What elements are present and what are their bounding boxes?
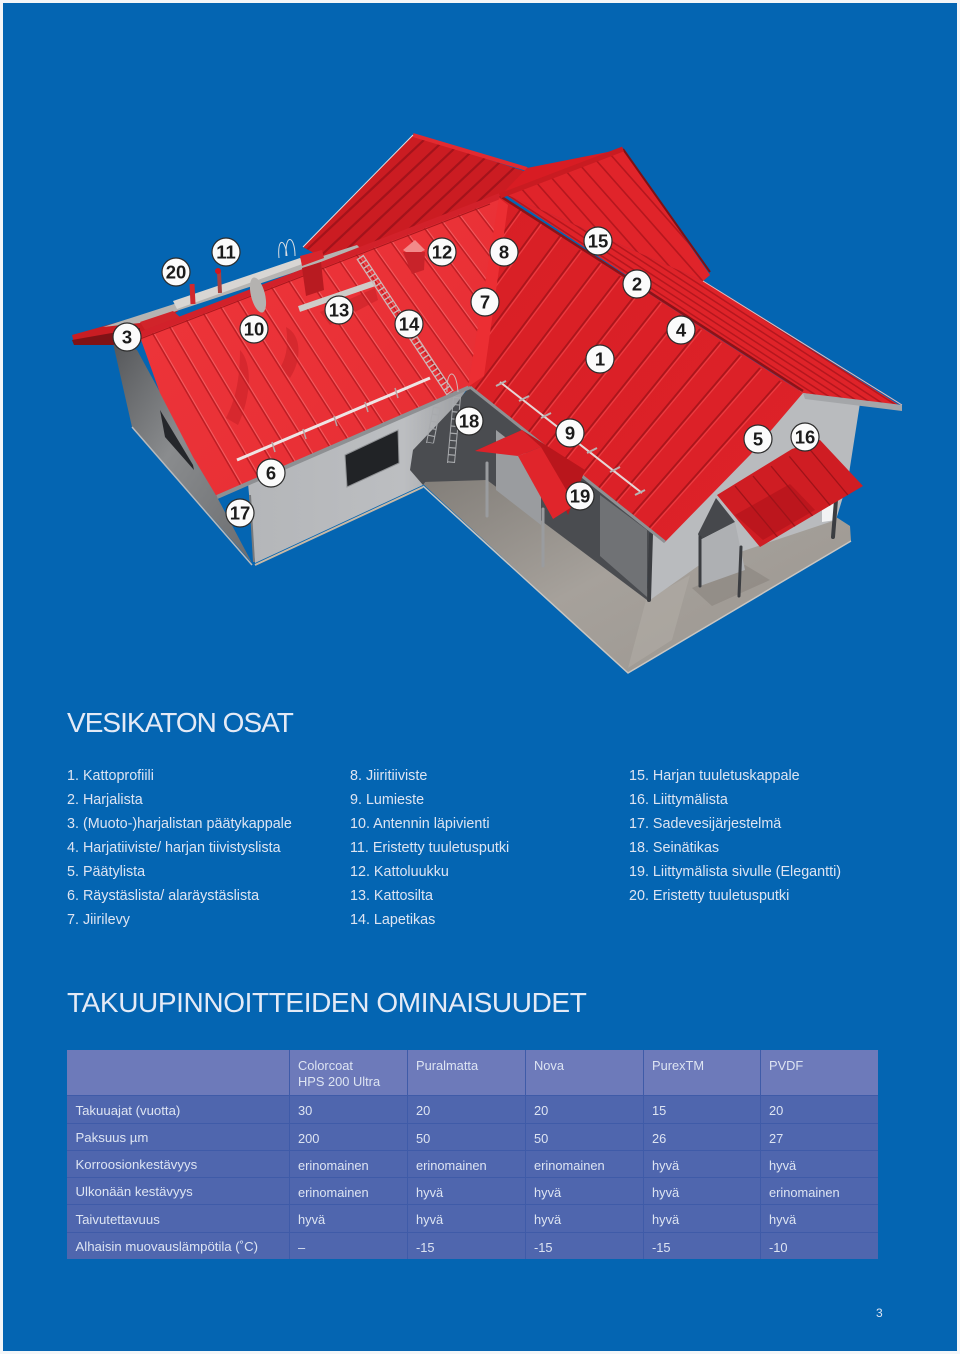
left main roof slope <box>141 197 500 499</box>
parts list column 3 <box>629 768 841 904</box>
numbered markers: 18 <box>459 410 479 432</box>
coating properties table: hyvä <box>652 1158 679 1172</box>
parts list column 2: 10. Antennin läpivienti <box>350 816 490 832</box>
coating properties table: 20 <box>416 1103 430 1118</box>
coating properties table: hyvä <box>652 1212 679 1227</box>
coating properties table: Ulkonään kestävyys <box>76 1184 193 1199</box>
numbered markers: 12 <box>432 242 452 262</box>
coating properties table: -15 <box>416 1240 435 1255</box>
house illustration with numbered roof parts <box>72 133 902 674</box>
parts list column 1: 3. (Muoto-)harjalistan päätykappale <box>67 816 292 832</box>
coating properties table: -10 <box>769 1240 788 1255</box>
chimney shadows on roof <box>226 288 378 425</box>
coating properties table: hyvä <box>298 1212 325 1227</box>
coating properties table: Korroosionkestävyys <box>76 1157 197 1172</box>
coating properties table: hyvä <box>534 1184 561 1200</box>
coating properties table: erinomainen <box>416 1158 487 1172</box>
coating properties table: erinomainen <box>534 1158 605 1172</box>
ridge band roof slope <box>507 196 902 411</box>
numbered markers: 8 <box>499 242 509 262</box>
parts list column 1: 1. Kattoprofiili <box>67 768 154 784</box>
coating properties table: hyvä <box>416 1184 443 1200</box>
numbered markers: 11 <box>216 242 236 262</box>
coating properties table: -15 <box>652 1240 671 1255</box>
parts list column 1: 5. Päätylista <box>67 864 145 880</box>
page number: 3 <box>876 1306 883 1320</box>
gable window <box>160 410 194 470</box>
parts list column 2: 8. Jiiritiiviste <box>350 768 427 784</box>
coating properties table: Alhaisin muovauslämpötila (˚C) <box>76 1239 258 1254</box>
coating properties table: PurexTM <box>652 1058 704 1073</box>
coating properties table: Takuuajat (vuotta) <box>76 1102 180 1118</box>
concrete floor slab <box>423 440 851 673</box>
roof bridge <box>299 283 375 309</box>
coating properties table <box>67 1050 878 1259</box>
parts list column 1: 6. Räystäslista/ alaräystäslista <box>67 888 259 904</box>
back right roof slope <box>506 148 711 281</box>
parts list column 1: 7. Jiirilevy <box>67 912 130 928</box>
back left roof slope <box>302 133 528 256</box>
parts list column 2: 9. Lumieste <box>350 792 424 808</box>
gable overhang and roof walkway <box>72 245 362 345</box>
parts list column 3: 18. Seinätikas <box>629 840 719 856</box>
antenna dish <box>247 276 269 314</box>
chimney <box>300 250 324 296</box>
left gable wall <box>113 343 252 565</box>
heading: vesikaton osat: VESIKATON OSAT <box>67 707 293 738</box>
porch roof over entrance <box>475 430 585 519</box>
coating properties table: – <box>298 1240 305 1255</box>
coating properties table: Taivutettavuus <box>76 1212 160 1226</box>
numbered markers <box>113 227 819 527</box>
parts list column 2 <box>350 768 509 928</box>
coating properties table: HPS 200 Ultra <box>298 1074 380 1089</box>
coating properties table: erinomainen <box>298 1184 369 1200</box>
vent pipe 20 <box>192 284 193 304</box>
parts list column 1: 2. Harjalista <box>67 792 143 808</box>
front wall <box>248 385 470 565</box>
coating properties table: 20 <box>769 1103 783 1118</box>
numbered markers: 19 <box>570 486 590 506</box>
numbered markers: 13 <box>329 300 349 320</box>
parts list column 2: 12. Kattoluukku <box>350 864 449 880</box>
right main roof slope <box>468 196 804 543</box>
right end wall <box>650 390 860 600</box>
parts list column 1: 4. Harjatiiviste/ harjan tiivistyslista <box>67 840 281 856</box>
parts list column 3: 20. Eristetty tuuletusputki <box>629 888 789 904</box>
numbered markers: 4 <box>676 320 687 340</box>
snow guard right <box>496 381 645 495</box>
coating properties table: hyvä <box>769 1212 796 1227</box>
porch inner wall <box>413 387 650 600</box>
ridge access loops <box>279 239 295 258</box>
numbered markers: 9 <box>565 422 575 444</box>
coating properties table: erinomainen <box>769 1184 840 1200</box>
numbered markers: 6 <box>266 462 276 484</box>
coating properties table: hyvä <box>534 1212 561 1227</box>
coating properties table: erinomainen <box>298 1158 369 1172</box>
coating properties table: PVDF <box>769 1058 803 1073</box>
parts list column 1 <box>67 768 292 928</box>
numbered markers: 20 <box>166 262 186 282</box>
coating properties table: hyvä <box>416 1212 443 1227</box>
numbered markers: 2 <box>632 274 642 294</box>
numbered markers: 7 <box>480 292 490 312</box>
numbered markers: 1 <box>595 348 605 370</box>
coating properties table: 20 <box>534 1103 548 1118</box>
parts list column 3: 16. Liittymälista <box>629 792 728 808</box>
coating properties table: 50 <box>416 1130 430 1146</box>
coating properties table: -15 <box>534 1240 553 1255</box>
parts list column 2: 14. Lapetikas <box>350 912 435 928</box>
numbered markers: 5 <box>753 428 763 450</box>
coating properties table: Paksuus µm <box>76 1130 148 1145</box>
left roof seams <box>152 208 494 485</box>
snow guard left <box>237 378 430 460</box>
roof ladder <box>357 255 453 395</box>
parts list column 2: 11. Eristetty tuuletusputki <box>350 840 509 856</box>
parts list column 3: 17. Sadevesijärjestelmä <box>629 816 781 832</box>
coating properties table: 26 <box>652 1130 666 1146</box>
coating properties table: 27 <box>769 1130 783 1146</box>
vent pipe 11 <box>215 268 221 293</box>
coating properties table: hyvä <box>769 1158 796 1172</box>
support posts <box>487 463 836 600</box>
coating properties table: hyvä <box>652 1184 679 1200</box>
parts list column 2: 13. Kattosilta <box>350 888 433 904</box>
coating properties table: Nova <box>534 1058 564 1073</box>
numbered markers: 17 <box>230 502 250 524</box>
heading: takuupinnoitteiden ominaisuudet: TAKUUPINNOITTEIDEN OMINAISUUDET <box>67 987 586 1018</box>
numbered markers: 15 <box>588 230 608 252</box>
coating properties table: Colorcoat <box>298 1058 353 1073</box>
coating properties table: Puralmatta <box>416 1058 478 1073</box>
coating properties table: 50 <box>534 1130 548 1146</box>
numbered markers: 3 <box>122 326 132 348</box>
numbered markers: 14 <box>399 314 420 334</box>
carport roof <box>717 440 863 547</box>
front window <box>345 430 399 487</box>
roof hatch <box>403 240 425 274</box>
coating properties table: 15 <box>652 1103 666 1118</box>
parts list column 3: 15. Harjan tuuletuskappale <box>629 768 800 784</box>
wall ladder <box>426 374 460 463</box>
coating properties table: 30 <box>298 1103 312 1118</box>
numbered markers: 10 <box>244 318 264 340</box>
numbered markers: 16 <box>795 426 815 448</box>
main ridge upper cap <box>500 149 623 196</box>
valley flashing <box>468 198 508 387</box>
parts list column 3: 19. Liittymälista sivulle (Elegantti) <box>629 864 841 880</box>
roof hardware <box>192 239 645 495</box>
coating properties table: 200 <box>298 1130 319 1146</box>
